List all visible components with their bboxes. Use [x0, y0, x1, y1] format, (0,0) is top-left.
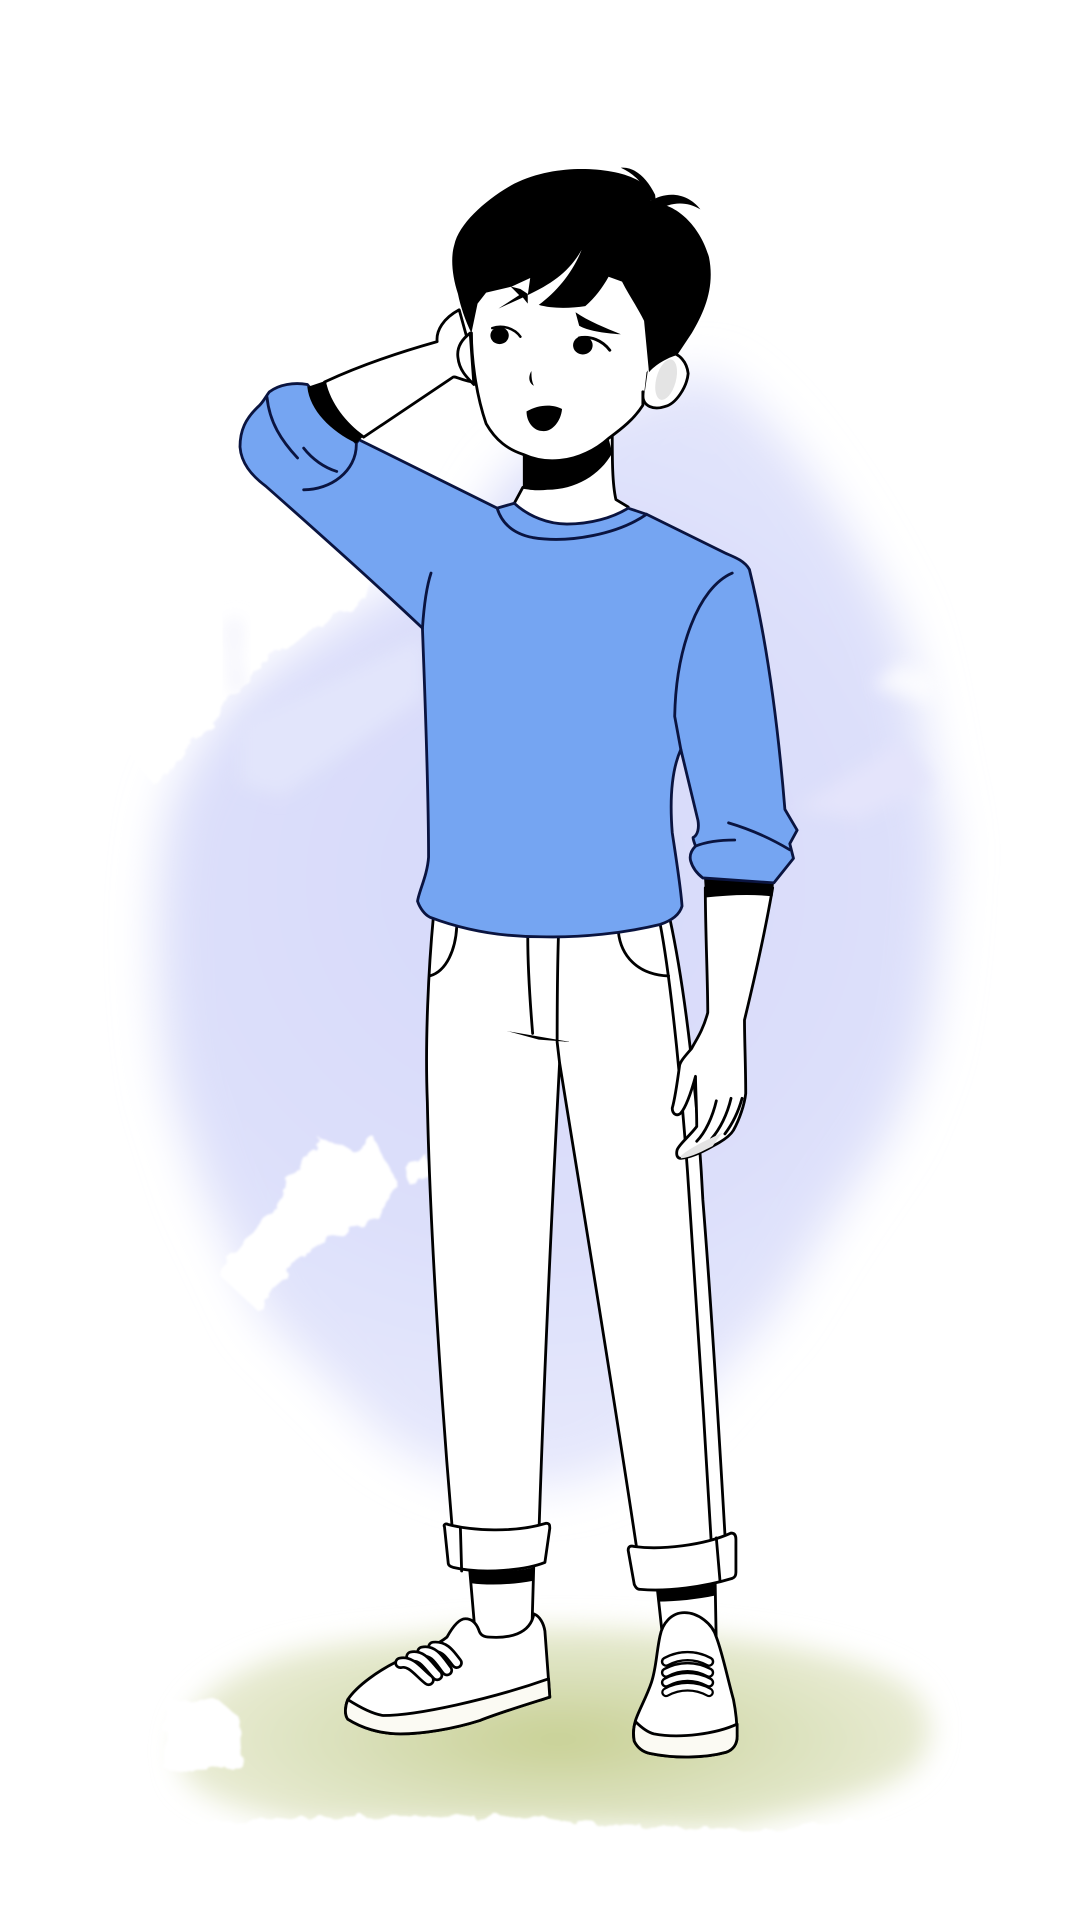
left shoe: [345, 1614, 550, 1734]
left ankle and sock: [469, 1561, 534, 1647]
left trouser cuff: [444, 1523, 550, 1571]
hair: [452, 168, 711, 372]
right trouser cuff: [628, 1533, 736, 1590]
background: watercolor blue blob: [73, 373, 946, 1488]
neck: [514, 435, 628, 529]
background: olive ground shadow: [165, 1627, 955, 1886]
lowered forearm and hand: [672, 878, 774, 1158]
open mouth: [527, 406, 562, 431]
nose: [529, 371, 534, 386]
right eye: [573, 336, 610, 354]
right ankle and sock: [656, 1580, 716, 1647]
left eye: [490, 327, 520, 344]
figure: standing boy: [240, 168, 797, 1757]
left eyebrow: [498, 287, 528, 309]
right shoe: [633, 1613, 737, 1757]
right eyebrow: [576, 312, 621, 334]
left ear: [458, 333, 474, 384]
right ear: [643, 353, 688, 408]
raised forearm and hand: [307, 310, 475, 443]
shirt: [240, 384, 797, 937]
pants: [427, 916, 726, 1565]
face: [471, 287, 655, 461]
